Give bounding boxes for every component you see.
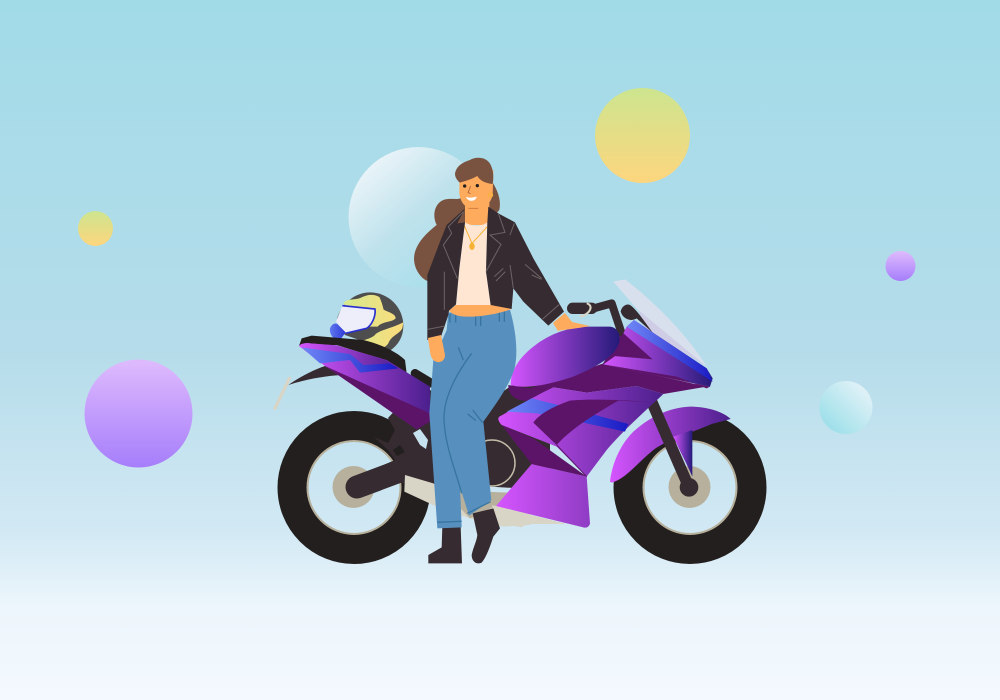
jacket lines bbox=[428, 212, 559, 329]
hub bbox=[332, 466, 374, 508]
tail fairing bbox=[299, 343, 430, 429]
frame gap bbox=[413, 429, 428, 449]
mid fairing bbox=[498, 386, 663, 477]
fork guard bbox=[673, 430, 692, 477]
torso bbox=[427, 195, 564, 340]
decorative circles bbox=[78, 88, 916, 468]
left boot bbox=[428, 527, 462, 563]
nose stripe bbox=[627, 320, 713, 382]
rim bbox=[644, 441, 736, 534]
large yellow circle bbox=[595, 88, 690, 183]
dark under tank bbox=[508, 363, 707, 401]
nose shadow bbox=[614, 333, 653, 359]
neck bbox=[465, 195, 489, 225]
top camo bbox=[343, 295, 396, 327]
blue stripe bbox=[507, 398, 628, 432]
rear parts: tail, engine bbox=[275, 366, 550, 490]
engine block bbox=[410, 370, 550, 490]
chin guard bbox=[330, 324, 346, 340]
tail light stick bbox=[275, 378, 289, 408]
handlebar grip bbox=[573, 291, 592, 325]
seat stub bbox=[415, 373, 432, 383]
hair top bbox=[455, 158, 493, 184]
tyre bbox=[628, 426, 752, 549]
fairing stripe bbox=[302, 347, 398, 373]
right hand bbox=[553, 313, 590, 331]
helmet shell bbox=[337, 292, 403, 351]
hair back bbox=[414, 178, 500, 281]
nose fairing bbox=[603, 320, 713, 387]
small cyan bubble bbox=[820, 381, 872, 434]
dark fairing swoosh bbox=[533, 400, 653, 445]
woman bbox=[414, 158, 590, 563]
seat bbox=[299, 336, 407, 373]
visor bbox=[336, 306, 375, 333]
top bbox=[456, 222, 491, 305]
eyes bbox=[463, 184, 466, 188]
smile bbox=[466, 197, 477, 201]
jeans seams bbox=[437, 312, 504, 522]
hub bbox=[668, 466, 710, 508]
small yellow circle bbox=[78, 211, 113, 246]
rear fairing bbox=[299, 336, 430, 429]
legs bbox=[428, 310, 516, 563]
tail bracket bbox=[288, 366, 342, 385]
jeans bbox=[429, 310, 516, 528]
windshield bbox=[613, 279, 707, 367]
face bbox=[459, 170, 493, 210]
chin line bbox=[468, 207, 478, 210]
engine ring bbox=[469, 440, 515, 486]
right boot bbox=[472, 508, 500, 563]
handlebar bbox=[590, 303, 622, 333]
fuel tank bbox=[511, 327, 620, 387]
midriff bbox=[449, 304, 512, 317]
fender bbox=[610, 407, 731, 483]
large translucent bubble bbox=[348, 147, 488, 287]
front wheel bbox=[628, 426, 752, 549]
nose bbox=[468, 186, 471, 194]
mirror bbox=[621, 305, 653, 333]
lower belly panel bbox=[496, 464, 590, 528]
swing arm and frame bbox=[357, 400, 440, 488]
motorcycle bbox=[275, 279, 752, 549]
fairing top band bbox=[299, 343, 398, 373]
exhaust bbox=[404, 475, 530, 527]
dark lower wedge bbox=[502, 425, 587, 477]
front fork bbox=[652, 402, 689, 487]
jacket bbox=[427, 207, 564, 340]
large purple circle bbox=[84, 360, 192, 468]
rim bbox=[308, 441, 400, 534]
front axle bbox=[680, 478, 698, 497]
rear wheel bbox=[292, 426, 416, 549]
clutch lever bbox=[580, 303, 591, 317]
earring bbox=[489, 193, 493, 197]
front fairing bbox=[492, 279, 731, 528]
frame black plate bbox=[393, 445, 405, 456]
silver under cover bbox=[492, 505, 567, 527]
lower camo bbox=[352, 322, 403, 349]
head bbox=[455, 158, 493, 210]
filler behind tank bbox=[600, 335, 630, 370]
left hand bbox=[428, 335, 445, 362]
necklace bbox=[464, 225, 487, 243]
helmet bbox=[330, 292, 403, 351]
fairing shadow bbox=[325, 366, 430, 429]
pendant bbox=[469, 243, 475, 250]
small purple circle bbox=[886, 251, 916, 281]
tyre bbox=[292, 426, 416, 549]
